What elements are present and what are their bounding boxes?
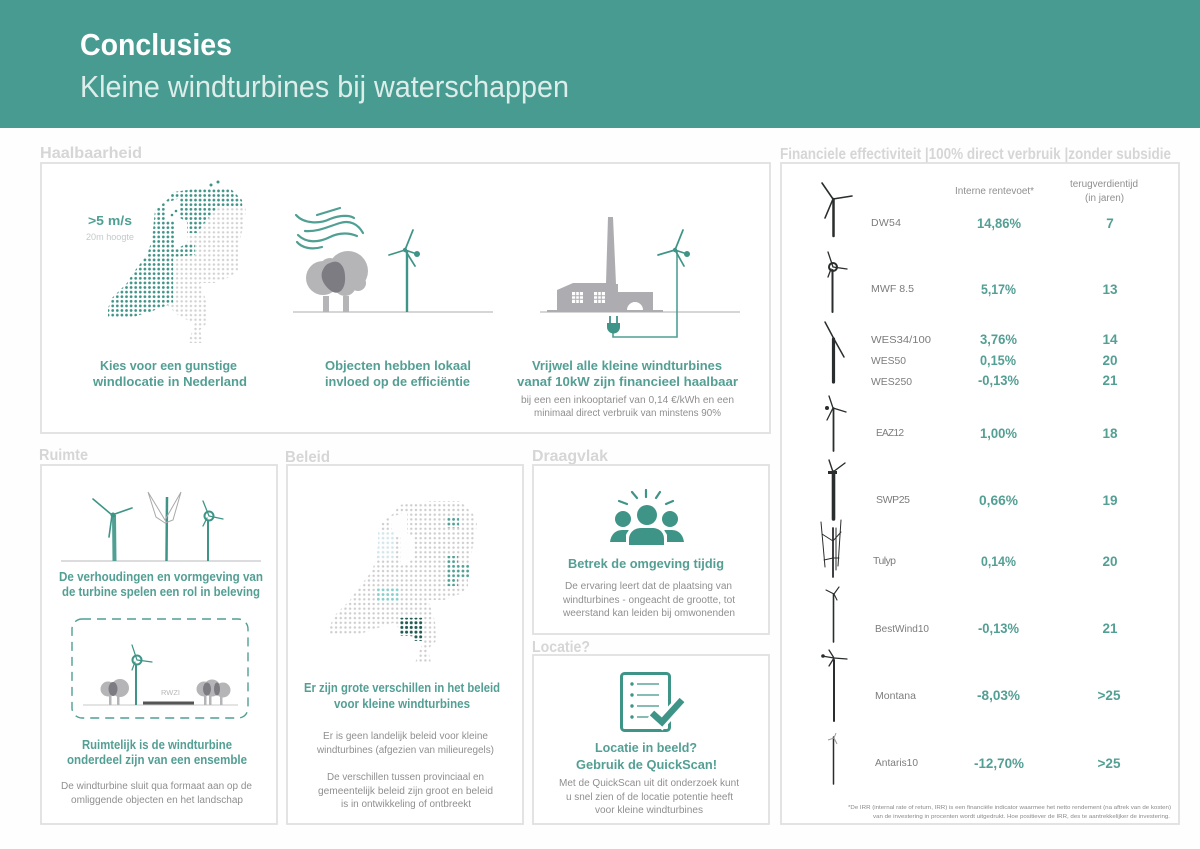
text: financieel haalbaar: vanaf 10kW zijn financieel haalbaar: [517, 374, 738, 389]
text: ensemble: onderdeel zijn van een ensemble: [67, 752, 247, 767]
text: quickscan: [559, 740, 739, 816]
panel: Beleid: [285, 449, 523, 824]
footnote: [848, 805, 1171, 820]
heading: Ruimte: Ruimte: [39, 447, 88, 464]
dashed frame: ensemble illustration: RWZI: [161, 690, 180, 697]
internal rate of return values: 5,17%: [981, 282, 1016, 297]
dashed frame: ensemble illustration: [72, 619, 248, 718]
text: draagvlak: Betrek de omgeving tijdig: [568, 556, 724, 571]
payback period values: 14: [1102, 332, 1118, 347]
text: quickscan: Met de QuickScan uit dit onderzoek kunt: [559, 778, 739, 789]
turbine names: Montana: [875, 690, 916, 702]
table column headers: Interne rentevoet*: [955, 186, 1034, 197]
text: beleid: Er is geen landelijk beleid voor kleine: [323, 731, 488, 742]
icon: factory with plug and turbine: [540, 217, 740, 337]
text: beleid: De verschillen tussen provinciaal en: [327, 772, 484, 783]
turbine: WES: [825, 322, 844, 382]
panel frame: [781, 163, 1179, 824]
turbine names: SWP25: [876, 494, 910, 506]
panel frame: [287, 465, 523, 824]
text: draagvlak: De ervaring leert dat de plaatsing van: [565, 581, 732, 592]
text: beleid: Er zijn grote verschillen in het beleid: [304, 680, 500, 695]
panel: Haalbaarheid: [40, 145, 770, 433]
turbine names: [871, 217, 931, 769]
turbine: Tulyp: [821, 520, 841, 577]
turbine names: MWF 8.5: [871, 283, 914, 295]
text: beleid: voor kleine windturbines: [334, 696, 470, 711]
text: windlocatie: [92, 358, 247, 389]
text: verhoudingen: [59, 569, 263, 599]
text: quickscan: Gebruik de QuickScan!: [576, 757, 717, 772]
wind speed label: [86, 213, 134, 242]
dot map: policy differences: [330, 501, 477, 663]
dot map: wind speed Netherlands: [108, 180, 246, 343]
heading: Haalbaarheid: Haalbaarheid: [40, 145, 142, 162]
text: quickscan: voor kleine windturbines: [595, 805, 703, 816]
header banner: [0, 0, 1200, 128]
text: financieel haalbaar: [517, 358, 738, 419]
text: verhoudingen: De verhoudingen en vormgeving van: [59, 569, 263, 584]
text: beleid: windturbines (afgezien van milieuregels): [316, 745, 494, 756]
internal rate of return values: 0,14%: [981, 554, 1016, 569]
payback period values: 20: [1102, 353, 1118, 368]
text: beleid: is in ontwikkeling of ontbreekt: [341, 799, 471, 810]
internal rate of return values: 14,86%: [977, 216, 1021, 231]
turbine: Montana: [821, 650, 847, 721]
text: beleid: [304, 680, 500, 810]
text: windlocatie: windlocatie in Nederland: [92, 374, 247, 389]
payback period values: [1098, 216, 1121, 771]
footnote: van de investering in procenten wordt uitgedrukt. Hoe positiever de IRR, des te aantrekkelijker de investering.: [873, 814, 1171, 820]
turbine names: WES50: [871, 355, 906, 367]
text: financieel haalbaar: Vrijwel alle kleine windturbines: [532, 358, 722, 373]
turbine: BestWind10: [826, 587, 839, 642]
table column headers: (in jaren): [1085, 193, 1124, 204]
text: ensemble: Ruimtelijk is de windturbine: [82, 737, 232, 752]
panel frame: [533, 655, 769, 824]
icon: people group: [610, 490, 684, 545]
turbine: SWP25: [828, 460, 845, 519]
turbine: EAZ12: [825, 396, 846, 451]
turbine names: WES34/100: [871, 334, 931, 346]
icon: three turbines: [61, 492, 261, 561]
payback period values: >25: [1098, 756, 1121, 771]
text: verhoudingen: de turbine spelen een rol in beleving: [62, 584, 260, 599]
turbine names: WES250: [871, 376, 912, 388]
turbine: Antaris10: [828, 733, 837, 784]
text: beleid: gemeentelijk beleid zijn groot en beleid: [318, 786, 493, 797]
turbine names: Tulyp: [873, 555, 896, 567]
text: financieel haalbaar: bij een een inkooptarief van 0,14 €/kWh en een: [521, 395, 734, 406]
text: ensemble: [61, 737, 252, 806]
internal rate of return values: 0,15%: [980, 353, 1016, 368]
internal rate of return values: [974, 216, 1024, 771]
text: quickscan: Locatie in beeld?: [595, 740, 697, 755]
text: draagvlak: [562, 556, 735, 619]
text: draagvlak: weerstand kan leiden bij omwonenden: [562, 608, 735, 619]
icon: checklist: [622, 674, 682, 730]
panel frame: [41, 163, 770, 433]
internal rate of return values: -8,03%: [977, 688, 1020, 703]
payback period values: 20: [1102, 554, 1118, 569]
panel frame: [41, 465, 277, 824]
payback period values: 18: [1102, 426, 1118, 441]
turbine silhouettes: [821, 183, 852, 784]
internal rate of return values: -0,13%: [978, 373, 1019, 388]
panel frame: [533, 465, 769, 634]
subtitle: Kleine windturbines bij waterschappen: [80, 69, 569, 104]
wind speed label: 20m hoogte: [86, 232, 134, 242]
text: windlocatie: Kies voor een gunstige: [100, 358, 237, 373]
text: lokale invloed: [325, 358, 471, 389]
payback period values: 21: [1102, 621, 1118, 636]
turbine names: BestWind10: [875, 623, 929, 635]
heading: Locatie?: Locatie?: [532, 639, 590, 656]
payback period values: 21: [1102, 373, 1118, 388]
text: ensemble: omliggende objecten en het landschap: [71, 795, 243, 806]
internal rate of return values: 3,76%: [980, 332, 1017, 347]
text: lokale invloed: invloed op de efficiëntie: [325, 374, 470, 389]
turbine: MWF 8.5: [828, 252, 847, 312]
text: draagvlak: windturbines - ongeacht de grootte, tot: [562, 595, 735, 606]
heading: Beleid: Beleid: [285, 449, 330, 466]
internal rate of return values: 0,66%: [979, 493, 1018, 508]
table column headers: terugverdientijd: [1070, 179, 1138, 190]
footnote: *De IRR (internal rate of return, IRR) is een financiële indicator waarmee het netto rendement (na aftrek van de kosten): [848, 805, 1171, 811]
text: financieel haalbaar: minimaal direct verbruik van minstens 90%: [534, 408, 721, 419]
payback period values: 19: [1102, 493, 1118, 508]
wind speed label: >5 m/s: [88, 213, 132, 228]
payback period values: >25: [1098, 688, 1121, 703]
payback period values: 7: [1106, 216, 1114, 231]
turbine names: EAZ12: [876, 428, 904, 439]
internal rate of return values: -0,13%: [978, 621, 1019, 636]
heading: Draagvlak: Draagvlak: [532, 448, 608, 465]
turbine names: Antaris10: [875, 757, 918, 769]
text: ensemble: De windturbine sluit qua formaat aan op de: [61, 781, 252, 792]
panel: Draagvlak: [532, 448, 769, 634]
internal rate of return values: 1,00%: [980, 426, 1017, 441]
turbine names: DW54: [871, 217, 901, 229]
text: quickscan: u snel zien of de locatie potentie heeft: [566, 792, 733, 803]
panel: Ruimte: [39, 447, 277, 824]
panel: Locatie: [532, 639, 769, 824]
title: Conclusies: [80, 27, 232, 62]
panel: Financiele effectiviteit: [780, 146, 1179, 824]
text: lokale invloed: Objecten hebben lokaal: [325, 358, 471, 373]
payback period values: 13: [1102, 282, 1118, 297]
table column headers: [955, 179, 1138, 204]
turbine: DW54: [822, 183, 852, 236]
icon: wind, trees and turbine: [293, 208, 493, 312]
internal rate of return values: -12,70%: [974, 756, 1024, 771]
